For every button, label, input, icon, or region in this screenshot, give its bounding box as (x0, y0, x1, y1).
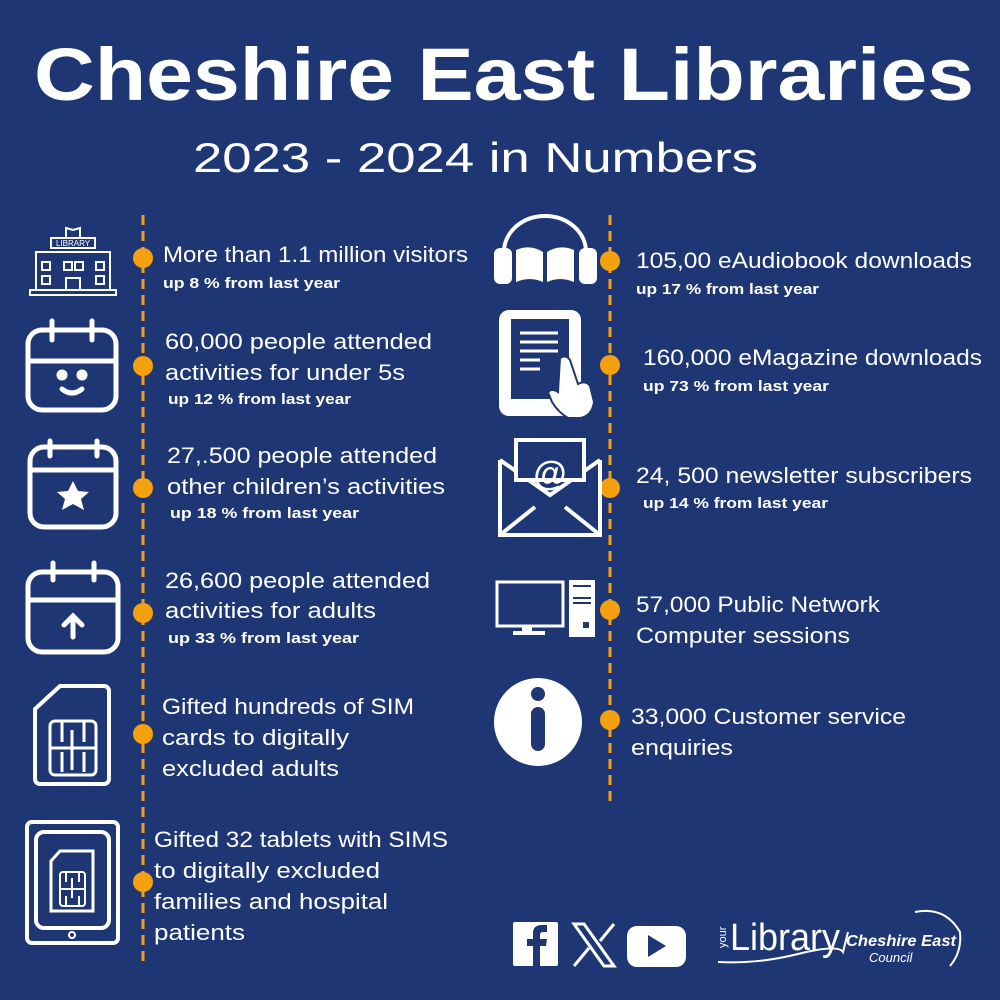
stat: eAudiobook: 105,00 eAudiobook downloads (636, 248, 972, 273)
stat: newsletter (636, 463, 972, 512)
stat: enquiries: 33,000 Customer service (631, 704, 906, 729)
stat: computer sessions: 57,000 Public Network (636, 592, 881, 617)
stat: children: other children’s activities (167, 474, 445, 499)
stat: newsletter: up 14 % from last year (643, 495, 828, 512)
stat: adults (165, 568, 430, 647)
subtitle: 2023 - 2024 in Numbers (193, 134, 758, 181)
stat: under 5s (165, 329, 432, 408)
stat: children: 27,.500 people attended (167, 443, 437, 468)
logo: Cheshire East Council (846, 911, 960, 966)
stat: tablets: patients (154, 920, 245, 945)
icon: tablet hand (499, 310, 594, 418)
stat: SIM cards: Gifted hundreds of SIM (162, 694, 414, 719)
icon: X (574, 924, 614, 966)
stat: visitors: up 8 % from last year (163, 275, 340, 292)
stat: SIM cards (162, 694, 414, 781)
stat: adults: up 33 % from last year (168, 630, 359, 647)
icon: info (494, 678, 582, 766)
stat: children (167, 443, 445, 522)
icon: facebook (513, 922, 558, 966)
stat: eMagazine (643, 345, 982, 395)
stat: tablets: families and hospital (154, 889, 388, 914)
icon: envelope @: @ (533, 455, 567, 493)
icon: calendar smile (28, 321, 116, 410)
stat: eAudiobook (636, 248, 972, 298)
stat: under 5s: 60,000 people attended (165, 329, 432, 354)
stat: eMagazine: up 73 % from last year (643, 378, 829, 395)
icon: envelope @ (500, 440, 600, 535)
icon: SIM card (35, 686, 109, 784)
logo: your Library: Library (730, 917, 840, 959)
stat: tablets: to digitally excluded (154, 858, 380, 883)
stat: eMagazine: 160,000 eMagazine downloads (643, 345, 982, 370)
stat: enquiries: enquiries (631, 735, 733, 760)
stat: eAudiobook: up 17 % from last year (636, 281, 819, 298)
stat: SIM cards: excluded adults (162, 756, 339, 781)
icon: calendar star (30, 441, 116, 527)
icon: calendar arrow (28, 563, 118, 652)
logo: Cheshire East Council: Cheshire East (846, 933, 957, 950)
stat: under 5s: activities for under 5s (165, 360, 405, 385)
stat: SIM cards: cards to digitally (162, 725, 349, 750)
icon: youtube (627, 926, 686, 967)
stat: adults: activities for adults (165, 598, 376, 623)
stat: enquiries (631, 704, 906, 760)
stat: tablets: Gifted 32 tablets with SIMS (154, 827, 448, 852)
icon: computer (497, 580, 595, 637)
stat: children: up 18 % from last year (170, 505, 359, 522)
stat: adults: 26,600 people attended (165, 568, 430, 593)
icon: headphones book (494, 216, 597, 284)
stat: computer sessions: Computer sessions (636, 623, 850, 648)
timeline: left (133, 215, 153, 965)
stat: tablets (154, 827, 448, 945)
logo: your Library: your (717, 926, 729, 948)
title: Cheshire East Libraries (34, 33, 974, 116)
stat: visitors (163, 242, 468, 292)
logo: Cheshire East Council: Council (869, 950, 913, 965)
stat: under 5s: up 12 % from last year (168, 391, 351, 408)
timeline: right (600, 215, 620, 805)
icon: tablet SIM (27, 822, 118, 943)
stat: computer sessions (636, 592, 881, 648)
icon: library building (30, 228, 116, 295)
icon: library building: LIBRARY (56, 239, 91, 248)
stat: newsletter: 24, 500 newsletter subscribers (636, 463, 972, 488)
stat: visitors: More than 1.1 million visitors (163, 242, 468, 267)
